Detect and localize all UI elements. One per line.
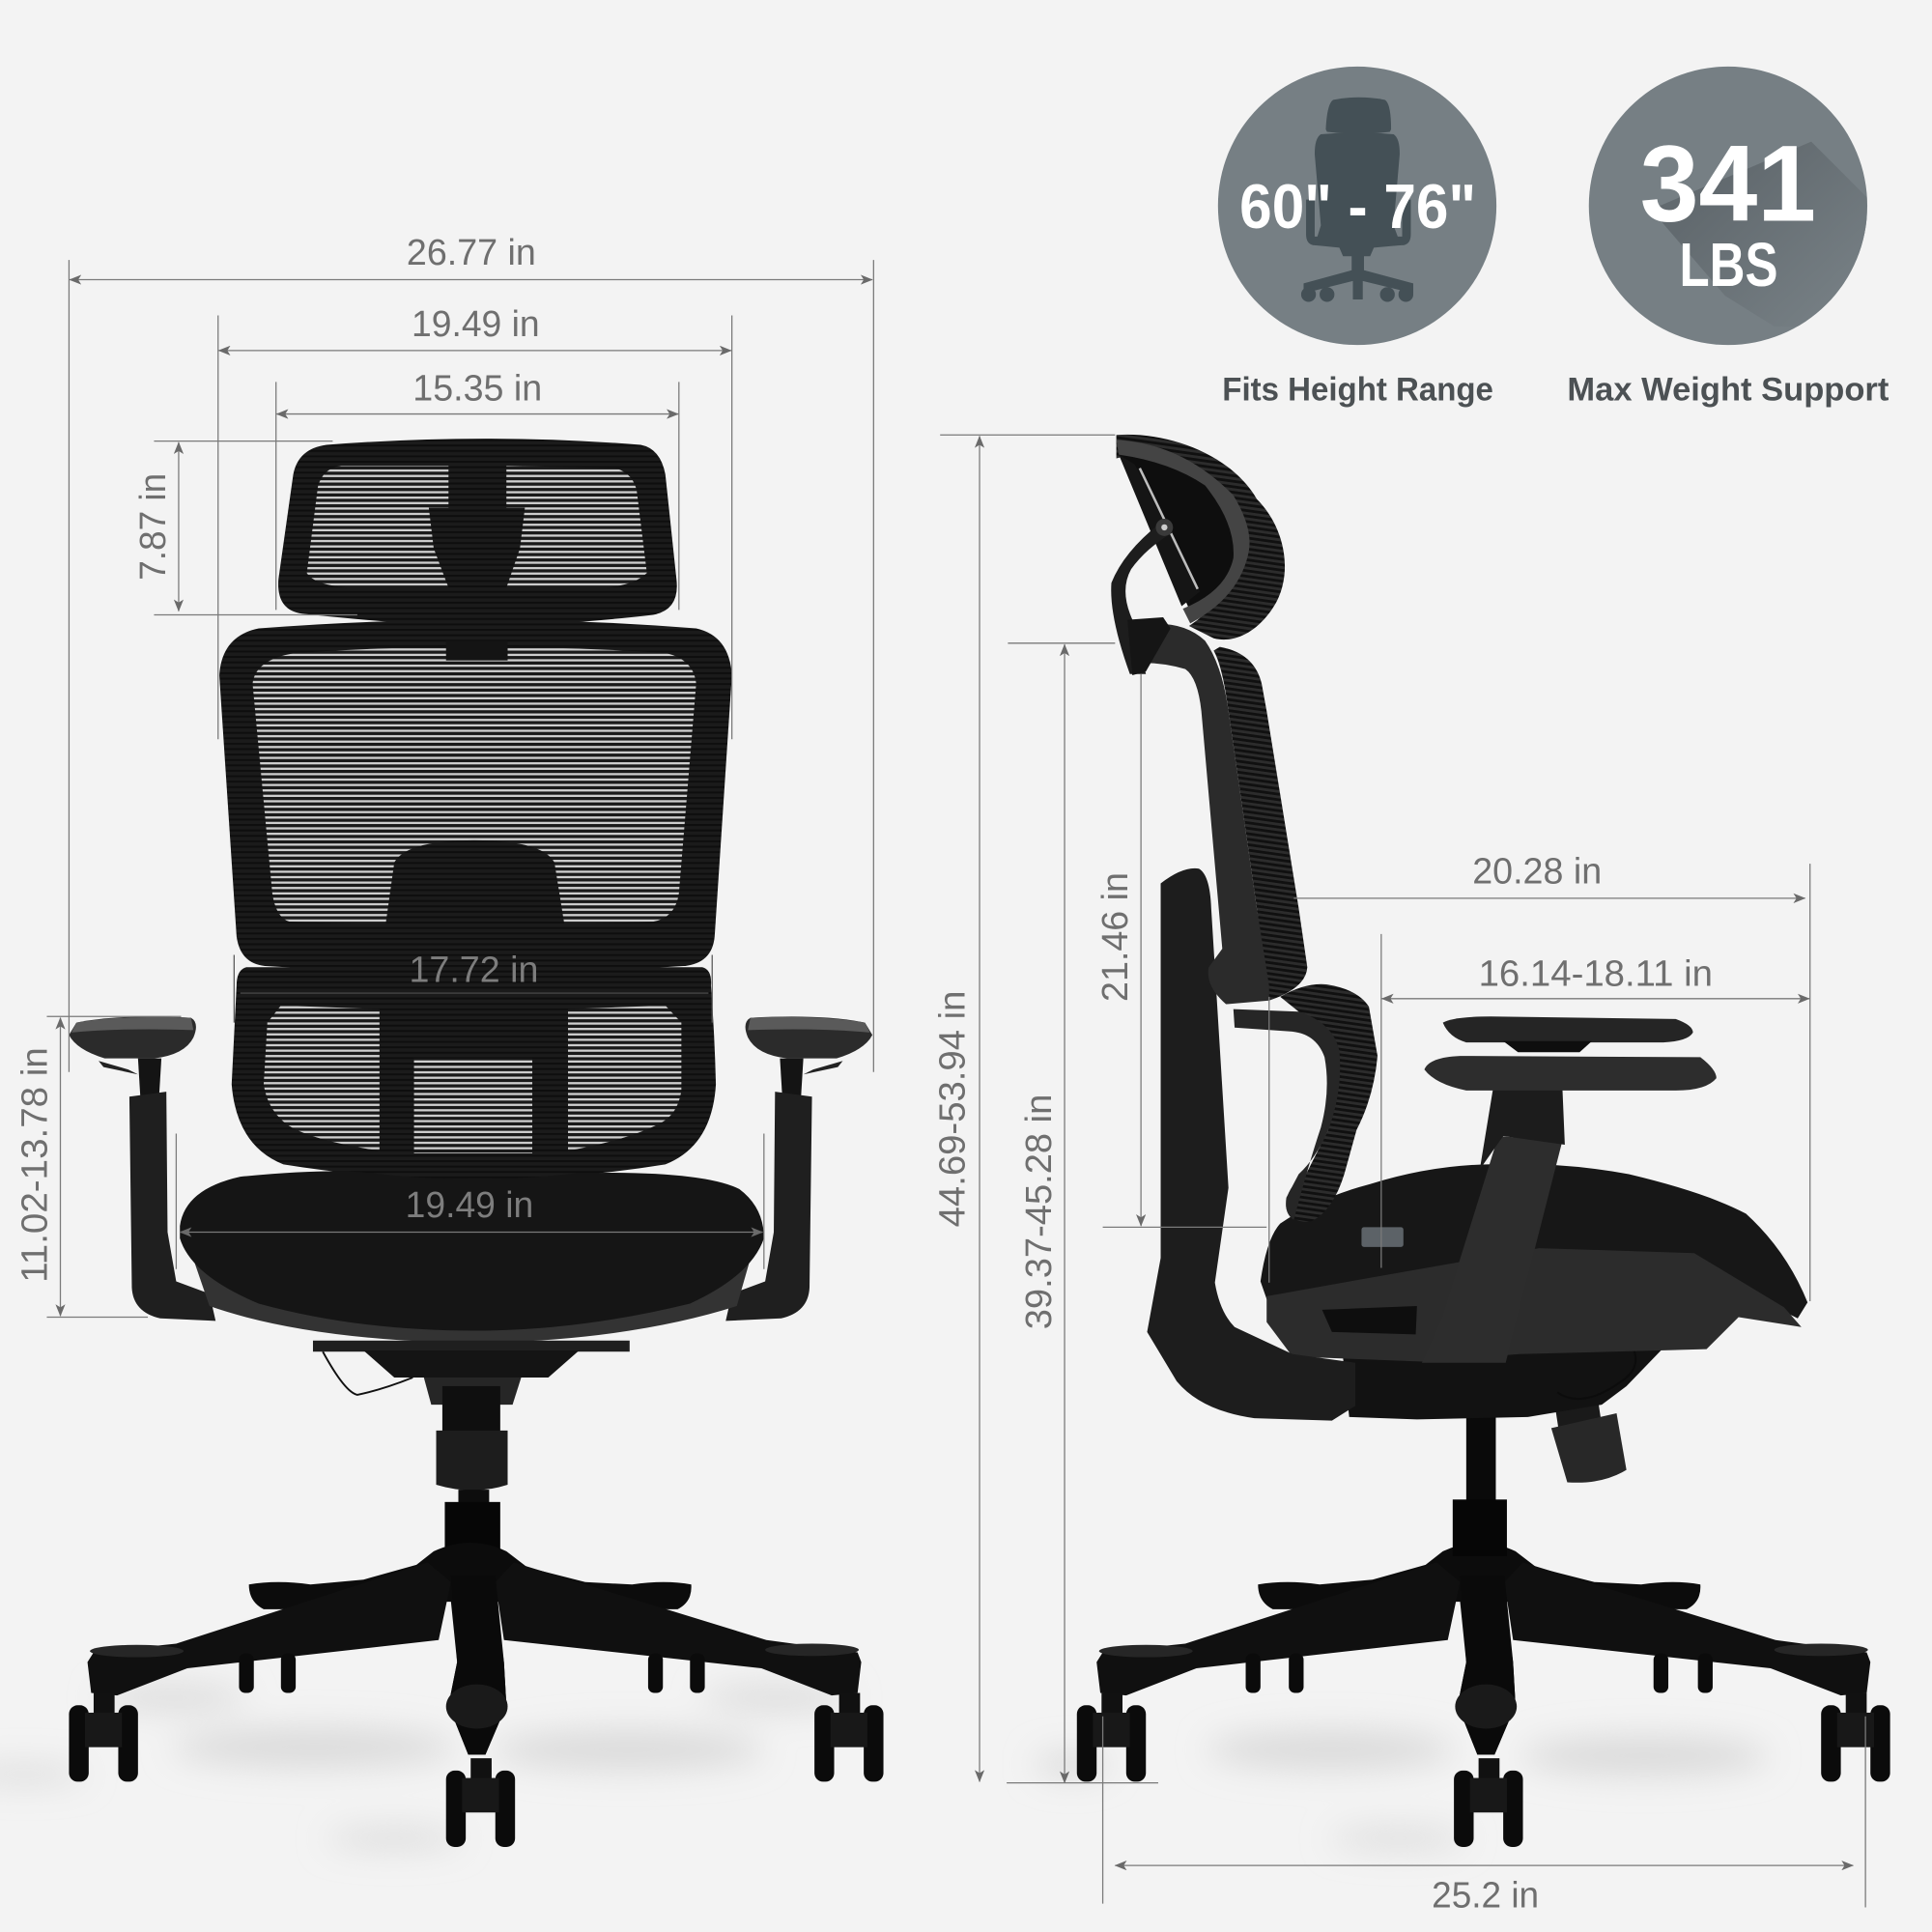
- icon: chair silhouette: [1301, 98, 1413, 301]
- dimension: 19.49 in seat: 19.49 in: [406, 1184, 533, 1226]
- dimension: 15.35 in: 15.35 in: [412, 368, 542, 410]
- dimension: 19.49 in seat: [176, 1133, 764, 1269]
- dimension: 39.37-45.28 in: 39.37-45.28 in: [1018, 1094, 1060, 1329]
- front headrest: [278, 439, 677, 629]
- side view chair: [1077, 435, 1890, 1847]
- front mechanism: [313, 1341, 630, 1405]
- dimension: 25.2 in: [1103, 1717, 1865, 1916]
- front left armrest: [69, 1016, 215, 1321]
- dimension: 19.49 in top: [218, 303, 732, 739]
- dimension: 21.46 in: [1094, 674, 1269, 1283]
- side lumbar mesh: [1234, 984, 1378, 1222]
- side headrest: [1111, 435, 1285, 675]
- long text shadow: [1651, 142, 1866, 327]
- dimension: 15.35 in: [276, 368, 679, 610]
- side lower armpad: [1424, 1056, 1717, 1091]
- side gas column: [1453, 1410, 1507, 1556]
- dimension: 11.02-13.78 in: 11.02-13.78 in: [14, 1047, 55, 1283]
- dimension lines front: [14, 232, 873, 1318]
- dimension: 17.72 in: 17.72 in: [409, 950, 538, 991]
- side upper back mesh: [1213, 647, 1307, 1001]
- dimension: 44.69-53.94 in: 44.69-53.94 in: [932, 991, 974, 1227]
- dimension lines side: [932, 435, 1865, 1916]
- weight value: 341: [1640, 122, 1816, 243]
- weight unit: LBS: [1680, 230, 1778, 299]
- side casters: [1077, 1654, 1890, 1847]
- dimension: 16.14-18.11 in: 16.14-18.11 in: [1479, 952, 1713, 994]
- side back spine: [1144, 624, 1269, 1005]
- front star base: [88, 1543, 862, 1754]
- side upper armpad: [1443, 1016, 1693, 1052]
- dimension: 20.28 in: 20.28 in: [1472, 851, 1602, 893]
- side seat pan: [1266, 1248, 1802, 1361]
- dimension: 17.72 in: [234, 950, 712, 1023]
- weight badge: [1567, 67, 1889, 409]
- front lumbar support: [232, 967, 716, 1179]
- side seat label tag: [1361, 1227, 1404, 1247]
- dimension: 21.46 in: 21.46 in: [1094, 872, 1136, 1002]
- side seat slot: [1322, 1306, 1417, 1334]
- front seat: [180, 1171, 764, 1343]
- front casters: [69, 1654, 884, 1847]
- front backrest: [219, 620, 732, 973]
- side arm stem: [1480, 1087, 1565, 1169]
- side mechanism: [1343, 1312, 1662, 1419]
- side star base: [1096, 1543, 1870, 1754]
- height range badge: [1218, 67, 1496, 409]
- side recline frame: [1148, 868, 1355, 1421]
- dimension: 7.87 in: [132, 441, 357, 614]
- dimension: 44.69-53.94 in: [932, 435, 1158, 1783]
- dimension: 19.49 in top: 19.49 in: [412, 303, 540, 345]
- front view chair: [69, 439, 884, 1847]
- height range value: 60" - 76": [1239, 171, 1476, 242]
- dimension: 7.87 in: 7.87 in: [132, 473, 174, 581]
- dimension: 11.02-13.78 in: [14, 1016, 181, 1318]
- height range caption: Fits Height Range: [1222, 372, 1493, 409]
- side arm column: [1422, 1136, 1562, 1363]
- dimension: 25.2 in: 25.2 in: [1432, 1874, 1539, 1916]
- front gas column: [437, 1386, 508, 1556]
- front right armrest: [725, 1016, 872, 1321]
- weight caption: Max Weight Support: [1567, 372, 1889, 409]
- side seat cushion: [1261, 1164, 1807, 1319]
- badge circle: [1589, 67, 1867, 345]
- dimension: 26.77 in: [69, 232, 873, 1072]
- badge circle: [1218, 67, 1496, 345]
- floor shadows: [0, 1686, 1768, 1848]
- dimension: 26.77 in: 26.77 in: [407, 232, 536, 273]
- side tilt knob: [1551, 1392, 1627, 1483]
